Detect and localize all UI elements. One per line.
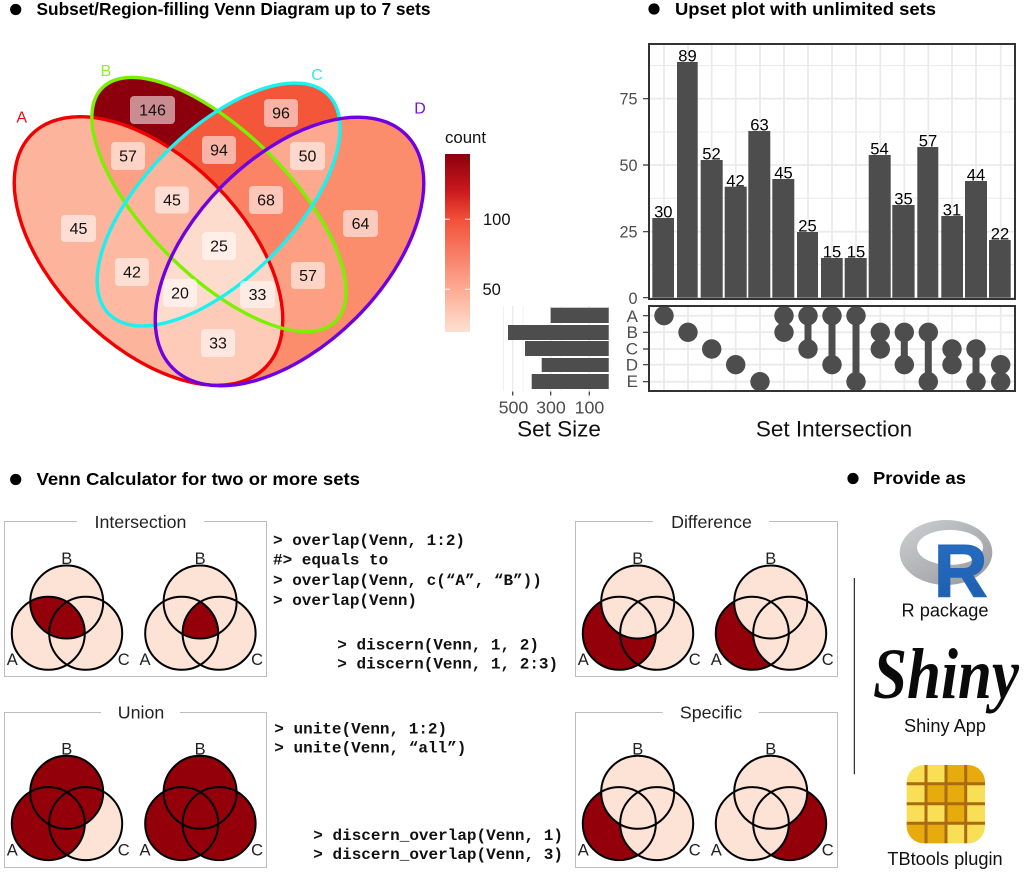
region count labels bbox=[61, 96, 378, 357]
panel: Intersection: Intersection bbox=[95, 512, 186, 532]
venn: only A highlighted: C bbox=[689, 841, 701, 859]
icon: R logo bbox=[900, 520, 992, 612]
bar value labels: 15 bbox=[847, 242, 865, 262]
bar value labels: 45 bbox=[774, 164, 793, 182]
venn: A, B and C overlap highlighted: B bbox=[195, 550, 206, 568]
region count labels: 96 bbox=[272, 106, 290, 122]
bar value labels: 25 bbox=[798, 216, 817, 236]
venn: only A highlighted: B bbox=[632, 740, 643, 758]
code block: overlap commands: > overlap(Venn, c(“A”, “B”)) bbox=[273, 572, 542, 590]
region fills bbox=[16, 79, 422, 384]
y axis: 25 bbox=[619, 224, 638, 242]
venn: A and B overlap highlighted bbox=[7, 550, 130, 670]
matrix gridlines bbox=[649, 306, 1015, 391]
matrix row labels: A bbox=[627, 307, 639, 326]
divider line bbox=[853, 578, 855, 774]
code block: overlap commands: #> equals to bbox=[273, 552, 388, 570]
venn: only C highlighted: B bbox=[765, 740, 776, 758]
region count labels: 57 bbox=[119, 148, 137, 166]
code block: unite commands bbox=[274, 720, 466, 757]
region count labels: 33 bbox=[249, 287, 266, 304]
venn: only A highlighted: A bbox=[578, 841, 589, 859]
caption: R package: R package bbox=[902, 601, 988, 621]
venn: A, B and C overlap highlighted bbox=[139, 550, 263, 670]
venn: A minus B highlighted: C bbox=[689, 651, 701, 669]
region count labels: 57 bbox=[299, 268, 317, 285]
set names: C bbox=[311, 67, 323, 84]
venn: all sets highlighted bbox=[139, 740, 263, 860]
matrix row labels: B bbox=[627, 323, 638, 342]
matrix row labels: C bbox=[626, 340, 638, 358]
bar value labels: 42 bbox=[726, 172, 745, 190]
y axis: 50 bbox=[619, 157, 638, 175]
code block: unite commands: > unite(Venn, 1:2) bbox=[274, 720, 447, 738]
venn: A minus B highlighted: A bbox=[578, 651, 589, 669]
bar value labels bbox=[654, 46, 1009, 262]
heading: Venn Calculator section: Venn Calculator for two or more sets bbox=[36, 469, 360, 489]
bar value labels: 35 bbox=[894, 190, 913, 208]
panel: Specific: Specific bbox=[680, 702, 742, 722]
panel: Intersection bbox=[4, 512, 266, 676]
bar value labels: 31 bbox=[943, 200, 961, 220]
venn: A and B overlap highlighted: A bbox=[7, 651, 18, 669]
bars bbox=[652, 62, 1011, 298]
matrix row labels bbox=[626, 307, 649, 391]
y axis bbox=[619, 90, 649, 308]
code block: discern commands: > discern(Venn, 1, 2) bbox=[337, 636, 539, 654]
code block: overlap commands: > overlap(Venn) bbox=[273, 592, 417, 610]
venn: A minus B and C highlighted: B bbox=[765, 550, 776, 568]
bar value labels: 30 bbox=[654, 202, 673, 222]
code block: discern commands bbox=[337, 636, 558, 673]
y axis: 0 bbox=[628, 290, 638, 308]
region count labels: 42 bbox=[123, 264, 141, 282]
venn: A union B highlighted: C bbox=[118, 841, 130, 859]
legend: count colour bar: count bbox=[445, 128, 486, 147]
y axis: 75 bbox=[619, 90, 638, 108]
region count labels: 68 bbox=[257, 192, 275, 210]
axis title: Set Intersection: Set Intersection bbox=[756, 416, 912, 442]
set names bbox=[16, 63, 426, 126]
gridlines and plot background bbox=[649, 44, 1015, 299]
icon: TBtools grid tile bbox=[906, 765, 986, 844]
region count labels: 94 bbox=[210, 142, 228, 160]
venn: only C highlighted: A bbox=[711, 841, 722, 859]
venn: only A highlighted bbox=[578, 740, 701, 860]
venn: A minus B and C highlighted: A bbox=[711, 651, 722, 669]
venn: A union B highlighted: A bbox=[7, 841, 18, 859]
chart: four-set region-filling Venn diagram bbox=[12, 65, 426, 388]
set outlines bbox=[0, 37, 473, 435]
set names: B bbox=[101, 63, 111, 80]
caption: TBtools plugin: TBtools plugin bbox=[887, 849, 1003, 869]
venn: A minus B and C highlighted: C bbox=[822, 651, 834, 669]
venn: A and B overlap highlighted: B bbox=[61, 550, 72, 568]
code block: overlap commands bbox=[273, 532, 542, 610]
venn: only C highlighted bbox=[711, 740, 834, 860]
venn: all sets highlighted: A bbox=[139, 841, 151, 859]
chart: set size bars: 500 bbox=[499, 398, 528, 418]
chart: set size bars: 300 bbox=[536, 398, 566, 418]
bar value labels: 57 bbox=[919, 132, 937, 150]
venn: all sets highlighted: C bbox=[251, 841, 263, 859]
set names: D bbox=[414, 100, 426, 118]
legend: count colour bar: 50 bbox=[482, 281, 501, 299]
matrix dots and connectors bbox=[654, 306, 1010, 391]
code block: discern_overlap commands: > discern_overlap(Venn, 3) bbox=[313, 846, 563, 864]
caption: Shiny App: Shiny App bbox=[904, 716, 986, 736]
code block: discern commands: > discern(Venn, 1, 2:3) bbox=[337, 655, 558, 673]
venn: A, B and C overlap highlighted: C bbox=[251, 651, 263, 669]
venn: A and B overlap highlighted: C bbox=[118, 651, 130, 669]
venn: A minus B highlighted bbox=[578, 550, 701, 670]
panel: Union: Union bbox=[118, 702, 164, 722]
legend: count colour bar: 100 bbox=[483, 211, 511, 229]
matrix row labels: D bbox=[626, 356, 638, 374]
icon: R logo: R bbox=[934, 530, 987, 612]
bar value labels: 54 bbox=[870, 140, 889, 158]
code block: unite commands: > unite(Venn, “all”) bbox=[274, 739, 466, 757]
set names: A bbox=[16, 110, 27, 126]
venn: only C highlighted: C bbox=[822, 841, 834, 859]
bar value labels: 15 bbox=[823, 242, 841, 262]
panel: Specific bbox=[576, 702, 838, 868]
region count labels: 50 bbox=[299, 148, 316, 166]
panel: Union bbox=[4, 702, 266, 868]
venn: A minus B and C highlighted bbox=[711, 550, 834, 670]
bar value labels: 52 bbox=[702, 144, 721, 164]
code block: discern_overlap commands bbox=[313, 827, 563, 864]
panel: Difference: Difference bbox=[671, 512, 752, 532]
region count labels: 25 bbox=[210, 238, 228, 256]
heading: Provide as section: Provide as bbox=[873, 468, 966, 488]
axis title: Set Size: Set Size bbox=[517, 416, 601, 442]
region count labels: 33 bbox=[209, 336, 227, 352]
venn: A union B highlighted bbox=[7, 740, 130, 860]
code block: discern_overlap commands: > discern_overlap(Venn, 1) bbox=[313, 827, 563, 845]
region count labels: 45 bbox=[163, 192, 181, 210]
chart: intersection membership matrix bbox=[626, 306, 1015, 391]
region count labels: 146 bbox=[139, 102, 166, 120]
bar value labels: 22 bbox=[991, 224, 1009, 244]
bar value labels: 63 bbox=[750, 116, 769, 134]
venn: A union B highlighted: B bbox=[61, 740, 72, 758]
chart: set size bars bbox=[499, 306, 609, 418]
region count labels: 45 bbox=[70, 221, 88, 238]
venn: all sets highlighted: B bbox=[195, 740, 206, 758]
matrix row labels: E bbox=[627, 372, 638, 391]
region count labels: 20 bbox=[171, 286, 189, 302]
legend: count colour bar bbox=[445, 128, 511, 332]
bar value labels: 89 bbox=[678, 46, 697, 66]
venn: A minus B highlighted: B bbox=[632, 550, 643, 568]
region count labels: 64 bbox=[352, 216, 370, 233]
code block: overlap commands: > overlap(Venn, 1:2) bbox=[273, 532, 465, 550]
chart: set intersection bars bbox=[619, 44, 1015, 308]
bar value labels: 44 bbox=[967, 166, 985, 184]
chart: set size bars: 100 bbox=[575, 398, 604, 418]
venn: A, B and C overlap highlighted: A bbox=[139, 651, 151, 669]
panel: Difference bbox=[576, 512, 838, 676]
